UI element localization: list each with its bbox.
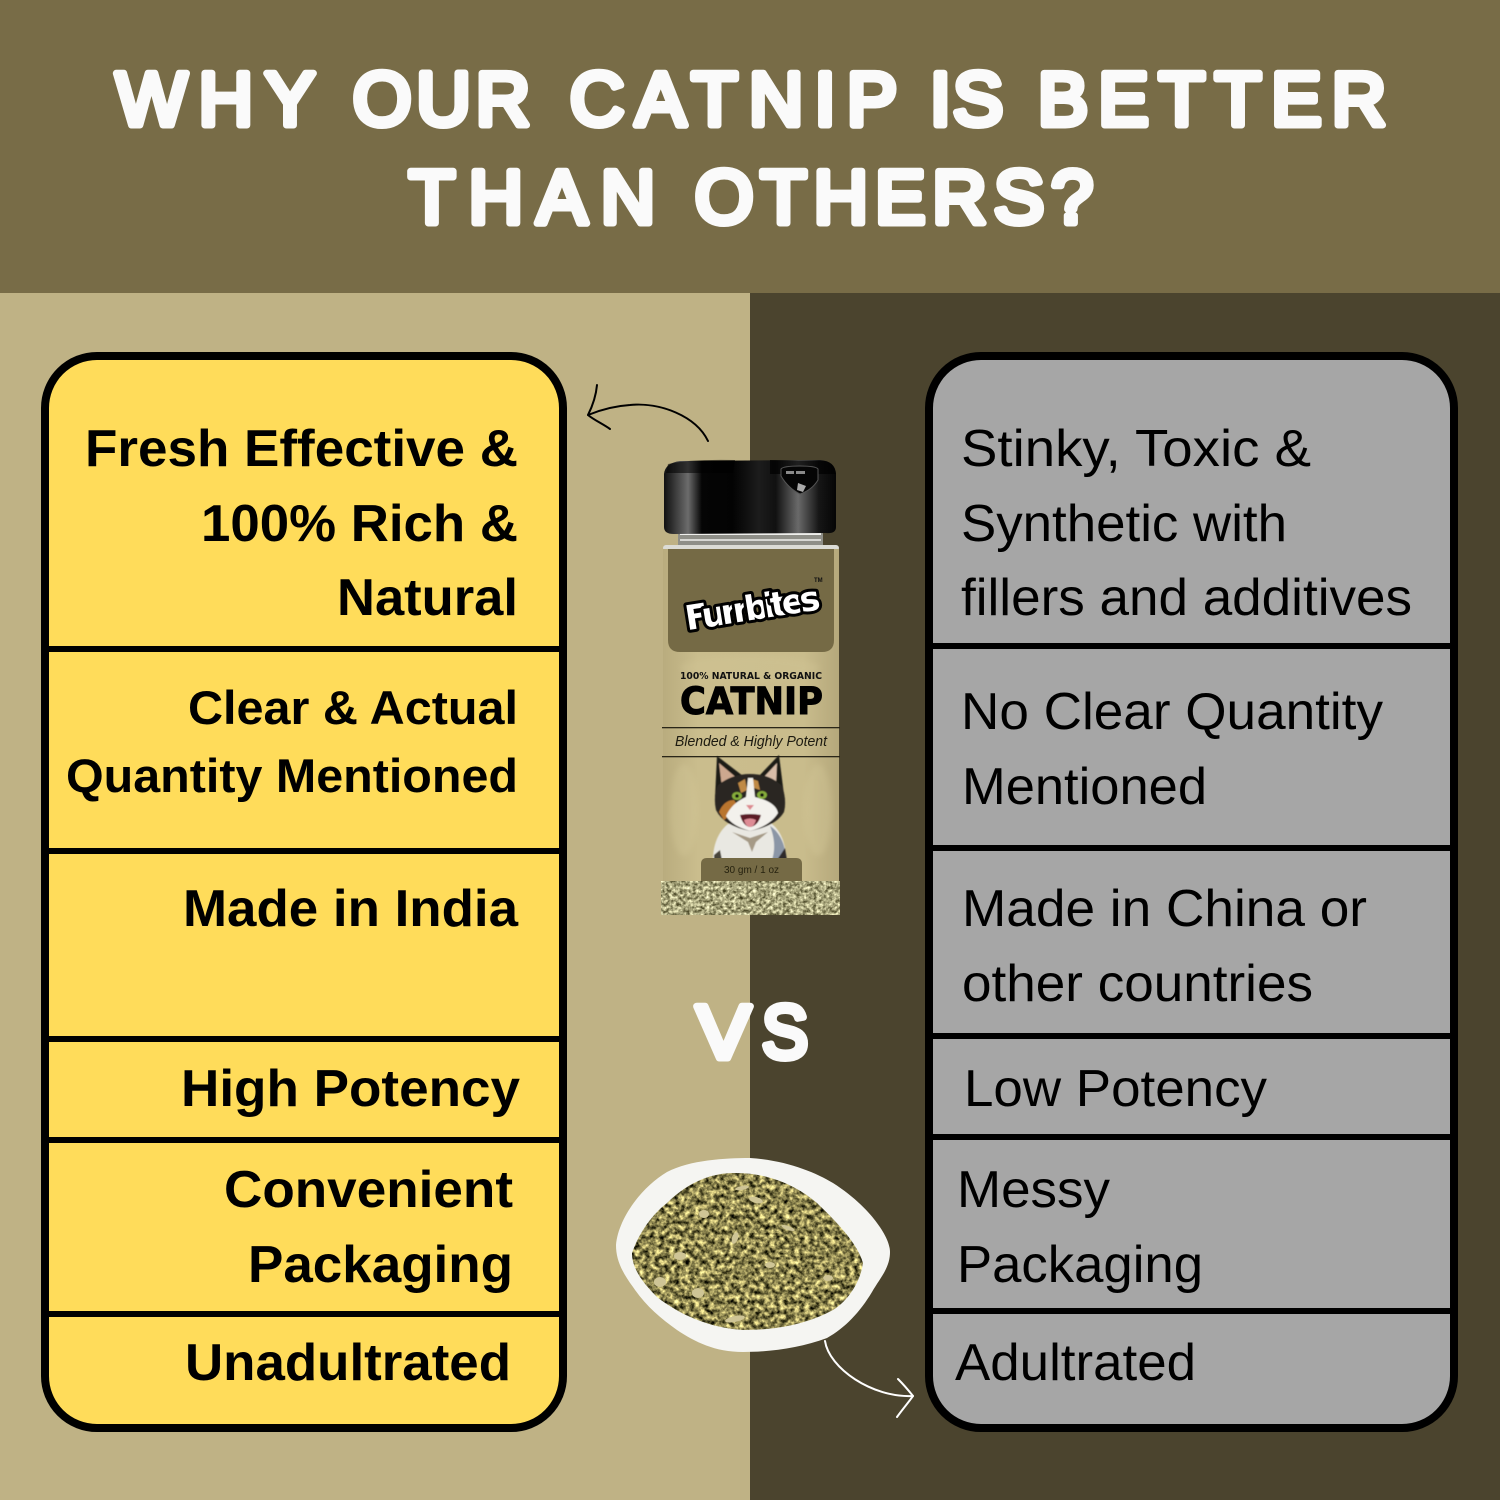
row: fresh and natural: Fresh Effective &	[85, 420, 518, 478]
row: no quantity	[961, 683, 1383, 816]
vs label	[696, 990, 808, 1074]
row: purity: Unadultrated	[185, 1334, 511, 1392]
title	[116, 57, 1386, 239]
row: fresh and natural: 100% Rich &	[201, 495, 518, 553]
arrow: bottle to left panel	[588, 385, 708, 441]
herbs in jar	[661, 881, 840, 915]
row: fresh and natural: Natural	[337, 569, 518, 627]
cat ears	[715, 755, 784, 798]
panel: other catnip	[929, 356, 1455, 1428]
product: catnip bottle	[661, 460, 840, 915]
cat eyes	[732, 792, 742, 800]
row: foreign origin	[962, 880, 1367, 1013]
row: quantity	[66, 681, 518, 802]
row: potency: High Potency	[181, 1060, 520, 1118]
row: stinky and synthetic	[961, 420, 1412, 627]
label text: 100% NATURAL & ORGANIC	[680, 671, 822, 682]
label text: Blended & Highly Potent	[675, 734, 828, 750]
left background	[0, 293, 750, 1500]
title: BETTER	[1038, 57, 1386, 141]
row: fresh and natural	[85, 420, 518, 627]
label text: CATNIP	[680, 680, 823, 723]
cat illustration	[713, 755, 787, 860]
row: stinky and synthetic: fillers and additives	[961, 569, 1412, 627]
row: quantity: Clear & Actual	[188, 681, 518, 734]
vs label: V	[696, 990, 750, 1074]
product: bowl of catnip	[616, 1158, 890, 1352]
row: quantity: Quantity Mentioned	[66, 749, 518, 802]
vs label: S	[762, 990, 808, 1074]
row: origin: Made in India	[183, 880, 519, 938]
row: packaging: Packaging	[248, 1236, 513, 1294]
row: adulterated: Adultrated	[955, 1334, 1196, 1392]
jar neck	[678, 530, 823, 545]
header band	[0, 0, 1500, 293]
title: IS	[930, 57, 1003, 141]
jar body	[663, 545, 839, 884]
cat nose and mouth	[746, 805, 754, 810]
jar cap	[664, 460, 836, 534]
title: OUR	[353, 57, 530, 141]
row: messy packaging: Packaging	[957, 1236, 1203, 1294]
title: OTHERS?	[695, 155, 1093, 239]
label text	[662, 671, 840, 757]
row: packaging: Convenient	[224, 1161, 513, 1219]
row: foreign origin: Made in China or	[962, 880, 1367, 938]
catnip pile	[628, 1168, 868, 1334]
brand panel	[668, 549, 834, 652]
weight badge: 30 gm / 1 oz	[724, 865, 779, 876]
row: low potency: Low Potency	[964, 1060, 1267, 1118]
cat chest	[713, 824, 786, 860]
row: foreign origin: other countries	[962, 955, 1313, 1013]
title: WHY	[116, 57, 315, 141]
right background	[750, 293, 1500, 1500]
row: packaging	[224, 1161, 513, 1294]
row: no quantity: Mentioned	[962, 758, 1207, 816]
row: messy packaging	[957, 1161, 1203, 1294]
row: messy packaging: Messy	[957, 1161, 1110, 1219]
title: THAN	[409, 155, 655, 239]
panel: our catnip	[41, 356, 567, 1428]
brand panel: TM	[814, 578, 823, 584]
arrow: bowl to right panel	[825, 1341, 913, 1417]
white bowl	[616, 1158, 890, 1352]
row: stinky and synthetic: Stinky, Toxic &	[961, 420, 1311, 478]
brand panel: Furrbites	[682, 578, 823, 639]
title: CATNIP	[570, 57, 897, 141]
cat head	[715, 774, 785, 831]
row: stinky and synthetic: Synthetic with	[961, 495, 1287, 553]
row: no quantity: No Clear Quantity	[961, 683, 1383, 741]
weight badge	[701, 858, 802, 882]
